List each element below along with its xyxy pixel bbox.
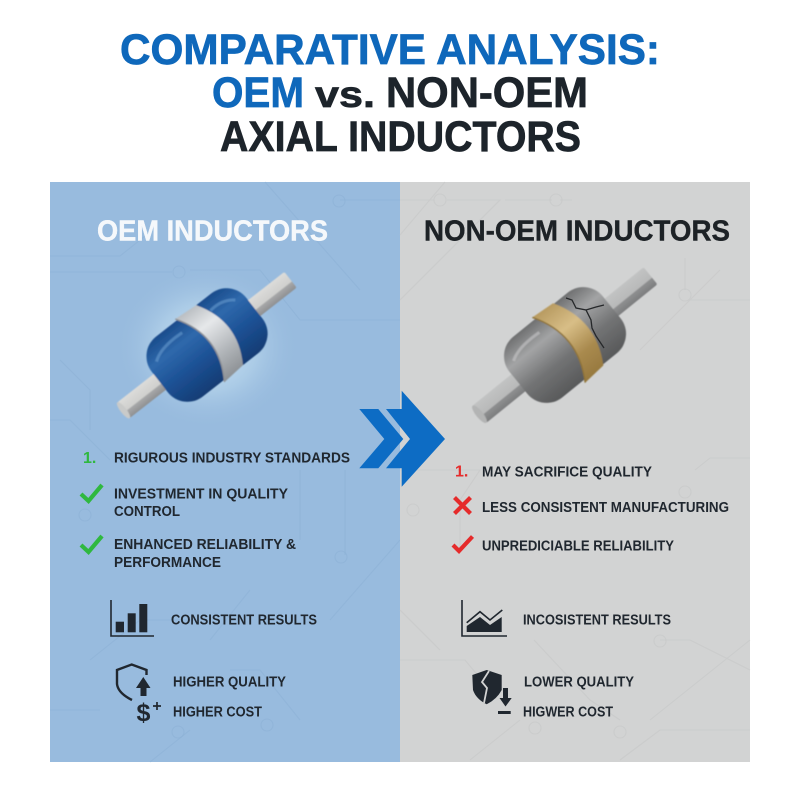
item: unpredictable reliability: UNPREDICIABLE RELIABILITY	[482, 539, 674, 555]
label: inconsistent results: INCOSISTENT RESULTS	[523, 613, 671, 629]
icon: shield with up arrow and dollar plus	[117, 664, 161, 727]
title	[120, 26, 660, 161]
item: investment in quality control: INVESTMENT IN QUALITY	[114, 487, 288, 503]
title: NON-OEM	[386, 69, 588, 117]
panel: OEM inductors	[50, 182, 400, 762]
item: may sacrifice quality: MAY SACRIFICE QUALITY	[482, 465, 652, 481]
icon: shield with up arrow and dollar plus: $	[136, 699, 150, 727]
illustration: blue axial inductor	[96, 248, 315, 444]
list: non-OEM drawbacks	[453, 464, 729, 555]
icon: erratic area chart	[462, 600, 507, 636]
crack lines	[566, 298, 604, 348]
label: lower quality: LOWER QUALITY	[524, 675, 634, 691]
icon: rising bar chart	[111, 600, 154, 636]
heading: non-OEM inductors: NON-OEM INDUCTORS	[424, 216, 730, 248]
arrow: blue double chevron between panels	[359, 391, 445, 487]
item: enhanced reliability and performance	[81, 536, 296, 571]
title: AXIAL INDUCTORS	[220, 113, 581, 161]
panel: non-OEM inductors	[400, 182, 750, 762]
item: enhanced reliability and performance: ENHANCED RELIABILITY &	[114, 537, 296, 553]
item: may sacrifice quality: 1.	[455, 464, 468, 480]
item: enhanced reliability and performance: PERFORMANCE	[114, 555, 221, 571]
item: investment in quality control: CONTROL	[114, 504, 180, 520]
title: COMPARATIVE ANALYSIS:	[120, 26, 660, 74]
label: higher cost (as spelled in source): HIGWER COST	[523, 705, 613, 721]
heading: OEM inductors: OEM INDUCTORS	[97, 216, 328, 248]
label: higher cost: HIGHER COST	[173, 705, 262, 721]
item: investment in quality control	[81, 485, 288, 520]
item: rigorous industry standards: RIGUROUS INDUSTRY STANDARDS	[114, 451, 350, 467]
icon: cracked shield with down arrow and minus	[472, 670, 512, 714]
title: OEM	[212, 69, 304, 117]
item: rigorous industry standards: 1.	[83, 450, 96, 467]
title: vs.	[315, 74, 375, 115]
illustration: cracked grey axial inductor	[450, 243, 677, 449]
list: OEM benefits	[81, 450, 350, 571]
label: higher quality: HIGHER QUALITY	[173, 675, 286, 691]
item: less consistent manufacturing: LESS CONSISTENT MANUFACTURING	[482, 500, 729, 516]
label: consistent results: CONSISTENT RESULTS	[171, 613, 317, 629]
